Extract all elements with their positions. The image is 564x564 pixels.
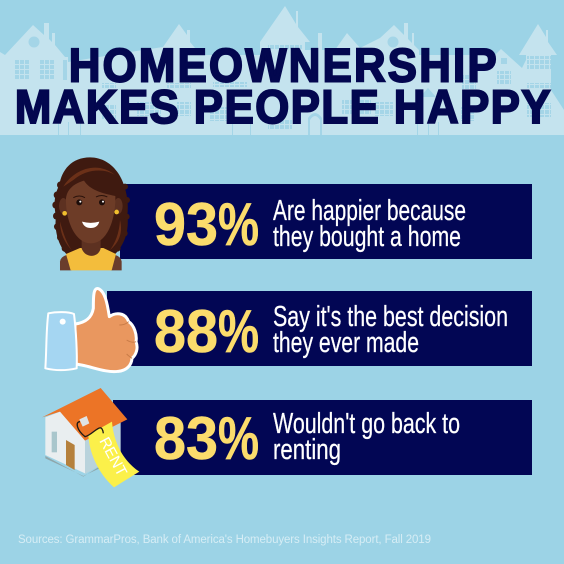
percentage 88 [154,298,259,365]
percentage 88: % [218,298,259,365]
icon: smiling woman [52,157,130,270]
caption 1 [273,195,466,253]
caption 1: Are happier because [273,195,466,227]
title: MAKES PEOPLE HAPPY [15,81,551,133]
caption 3: Wouldn't go back to [273,408,460,440]
percentage 93: % [218,191,259,258]
percentage 83: 83 [154,405,218,472]
percentage 83 [154,405,259,472]
bar 2 [107,291,532,366]
percentage 88: 88 [154,298,218,365]
percentage 93 [154,191,259,258]
caption 3: renting [273,434,341,466]
title [15,39,551,133]
houses skyline banner [0,6,564,135]
bar 3 [113,400,532,475]
bar 1 [120,184,532,259]
caption 2: they ever made [273,327,419,359]
stat row 1: 93% happier [120,184,532,259]
percentage 83: % [218,405,259,472]
stat row 3: 83% not renting [113,400,532,475]
caption 3 [273,408,460,466]
caption 1: they bought a home [273,221,461,253]
icon: house with rent tag: RENT [95,435,130,480]
caption 2 [273,301,508,359]
icon: thumbs up [45,289,137,372]
sources footnote: Sources: GrammarPros, Bank of America's Homebuyers Insights Report, Fall 2019 [18,534,431,546]
stat row 2: 88% best decision [107,291,532,366]
percentage 93: 93 [154,191,218,258]
title: HOMEOWNERSHIP [69,39,497,92]
icon: house with rent tag [42,388,139,487]
